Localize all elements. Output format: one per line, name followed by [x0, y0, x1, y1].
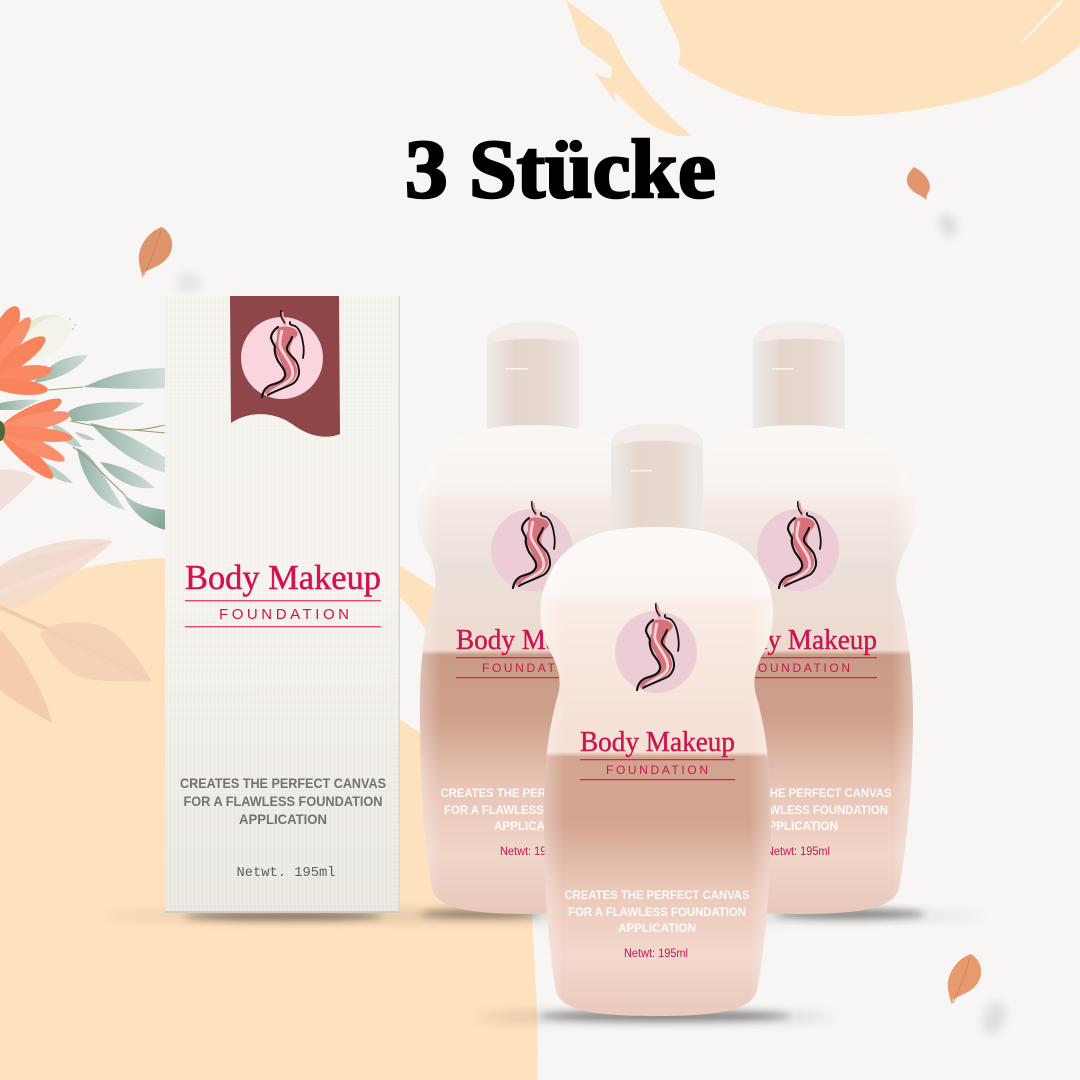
bottle description [564, 888, 750, 935]
bottle: front [540, 424, 773, 1016]
bottle brand name: Body Makeup [580, 726, 735, 758]
box body [165, 296, 400, 913]
bottle: back left [416, 322, 649, 914]
box ribbon [230, 296, 340, 437]
bottle: back left: FOUNDATION [482, 661, 584, 675]
title: 3 Stücke [405, 123, 716, 216]
box logo [241, 310, 323, 399]
bottle: back right: Body Makeup [722, 624, 877, 656]
bottle description: FOR A FLAWLESS FOUNDATION [568, 905, 746, 919]
bottle description: APPLICATION [618, 921, 696, 935]
box description: APPLICATION [239, 811, 327, 827]
box description: CREATES THE PERFECT CANVAS [180, 775, 386, 791]
box net weight: Netwt. 195ml [236, 865, 336, 881]
orange flower: upper [0, 302, 53, 397]
bottle: back right: APPLICATION [760, 819, 838, 833]
bottle: back left: APPLICATION [494, 819, 572, 833]
bottle description: CREATES THE PERFECT CANVAS [564, 888, 750, 902]
peach brush stroke: top centre [566, 0, 692, 136]
floor shadow: back row [105, 909, 985, 920]
falling leaf: upper left [139, 227, 202, 294]
bottle net weight: Netwt: 195ml [624, 946, 688, 960]
bottle subtitle: FOUNDATION [606, 763, 708, 777]
bottle: back right: Netwt: 195ml [766, 844, 830, 858]
bottle logo [615, 603, 697, 693]
green leaves [0, 355, 166, 530]
orange flower: lower [0, 393, 74, 484]
pale leaf cluster [0, 469, 151, 723]
box description: FOR A FLAWLESS FOUNDATION [184, 793, 382, 809]
bottle body [540, 527, 773, 1016]
box subtitle: FOUNDATION [219, 606, 349, 623]
bottle: back right: FOUNDATION [748, 661, 850, 675]
product box [165, 296, 400, 913]
falling leaf: lower right [948, 954, 1010, 1038]
box description [180, 775, 386, 827]
falling leaf: upper right [907, 167, 960, 239]
floor shadow: front bottle [475, 1011, 835, 1021]
bottle: back right: FOR A FLAWLESS FOUNDATION [710, 803, 888, 817]
white flower bud [22, 315, 76, 360]
bottle: back right: CREATES THE PERFECT CANVAS [706, 786, 892, 800]
box brand name: Body Makeup [185, 558, 381, 597]
bottle: back left: Netwt: 195ml [500, 844, 564, 858]
bottle: back left: FOR A FLAWLESS FOUNDATION [444, 803, 622, 817]
bottle: back left: Body Makeup [456, 624, 611, 656]
peach blob: bottom left [0, 558, 538, 1080]
bottle cap [611, 424, 703, 534]
peach blob: top right [659, 0, 1080, 116]
bottle: back right [682, 322, 915, 914]
bottle: back left: CREATES THE PERFECT CANVAS [440, 786, 626, 800]
